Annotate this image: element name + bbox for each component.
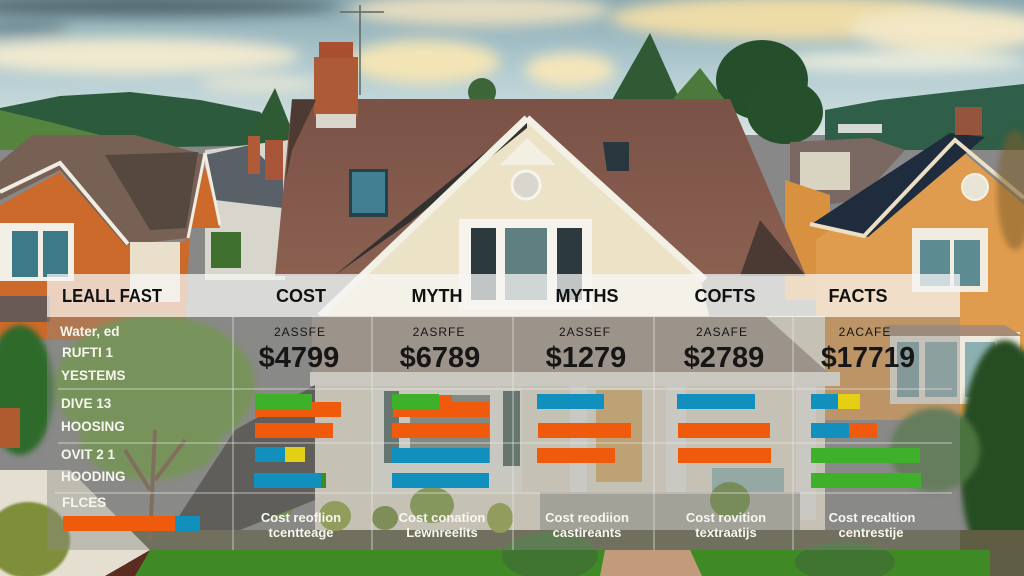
bars: facts column bbox=[811, 394, 921, 488]
price column: cost: 2ASSFE bbox=[274, 325, 326, 339]
price column: myth bbox=[400, 325, 480, 374]
price column: myth: 2ASRFE bbox=[413, 325, 465, 339]
price column: facts: $17719 bbox=[821, 342, 915, 374]
column headers: MYTH bbox=[412, 286, 462, 306]
table panel: translucent overlay bbox=[47, 274, 960, 550]
column footers: textraatijs bbox=[695, 525, 757, 540]
price column: cost: $4799 bbox=[259, 342, 339, 374]
row labels: DIVE 13 bbox=[61, 396, 112, 411]
row labels: Water, ed bbox=[60, 324, 120, 339]
column footers: Cost rovition bbox=[686, 510, 766, 525]
background: distant tree line bbox=[0, 5, 1024, 150]
column headers: FACTS bbox=[828, 286, 888, 306]
column footers: centrestije bbox=[838, 525, 904, 540]
column footers: Lewnreelits bbox=[406, 525, 478, 540]
main house: lower storey and porch bbox=[310, 316, 840, 531]
price column: facts bbox=[821, 325, 915, 374]
column footers: castireants bbox=[553, 525, 621, 540]
column footers: tcentteage bbox=[268, 525, 334, 540]
row labels: YESTEMS bbox=[61, 368, 126, 383]
row labels: OVIT 2 1 bbox=[61, 447, 116, 462]
column footers: Cost recaltion bbox=[829, 510, 915, 525]
bars: cost column bbox=[254, 394, 341, 488]
right neighbouring house bbox=[785, 107, 1024, 576]
main house: front gable bbox=[320, 118, 710, 320]
price column: myths bbox=[546, 325, 626, 374]
price column: costs: $2789 bbox=[684, 342, 764, 374]
column headers: LEALL FAST bbox=[62, 286, 162, 306]
bars: costs column bbox=[677, 394, 771, 463]
column footers bbox=[261, 510, 915, 540]
background: sky with clouds bbox=[0, 0, 1024, 135]
column footers: Cost conation bbox=[399, 510, 485, 525]
ground: lawn, path and shrubs bbox=[0, 315, 1024, 576]
row labels: FLCES bbox=[62, 495, 106, 510]
price column: cost bbox=[259, 325, 339, 374]
column headers: MYTHS bbox=[556, 286, 618, 306]
price column: myths: 2ASSEF bbox=[559, 325, 611, 339]
price column: myth: $6789 bbox=[400, 342, 480, 374]
price column: costs bbox=[684, 325, 764, 374]
column footers: Cost reoflion bbox=[261, 510, 341, 525]
column headers bbox=[62, 286, 888, 306]
row labels: HOOSING bbox=[61, 419, 125, 434]
row labels: HOODING bbox=[61, 469, 126, 484]
price column: facts: 2ACAFE bbox=[839, 325, 891, 339]
row labels: RUFTI 1 bbox=[62, 345, 113, 360]
main house: roof and chimney bbox=[275, 42, 806, 276]
price column: costs: 2ASAFE bbox=[696, 325, 748, 339]
table body band bbox=[47, 317, 960, 550]
row labels bbox=[60, 324, 126, 510]
table header band bbox=[47, 274, 960, 317]
bars: myths column bbox=[537, 394, 631, 463]
column footers: Cost reodiion bbox=[545, 510, 629, 525]
left neighbouring house bbox=[0, 135, 290, 340]
column headers: COFTS bbox=[694, 286, 756, 306]
column headers: COST bbox=[276, 286, 326, 306]
price column: myths: $1279 bbox=[546, 342, 626, 374]
bar: fees row bbox=[63, 516, 200, 531]
bars: myth column bbox=[392, 394, 489, 488]
